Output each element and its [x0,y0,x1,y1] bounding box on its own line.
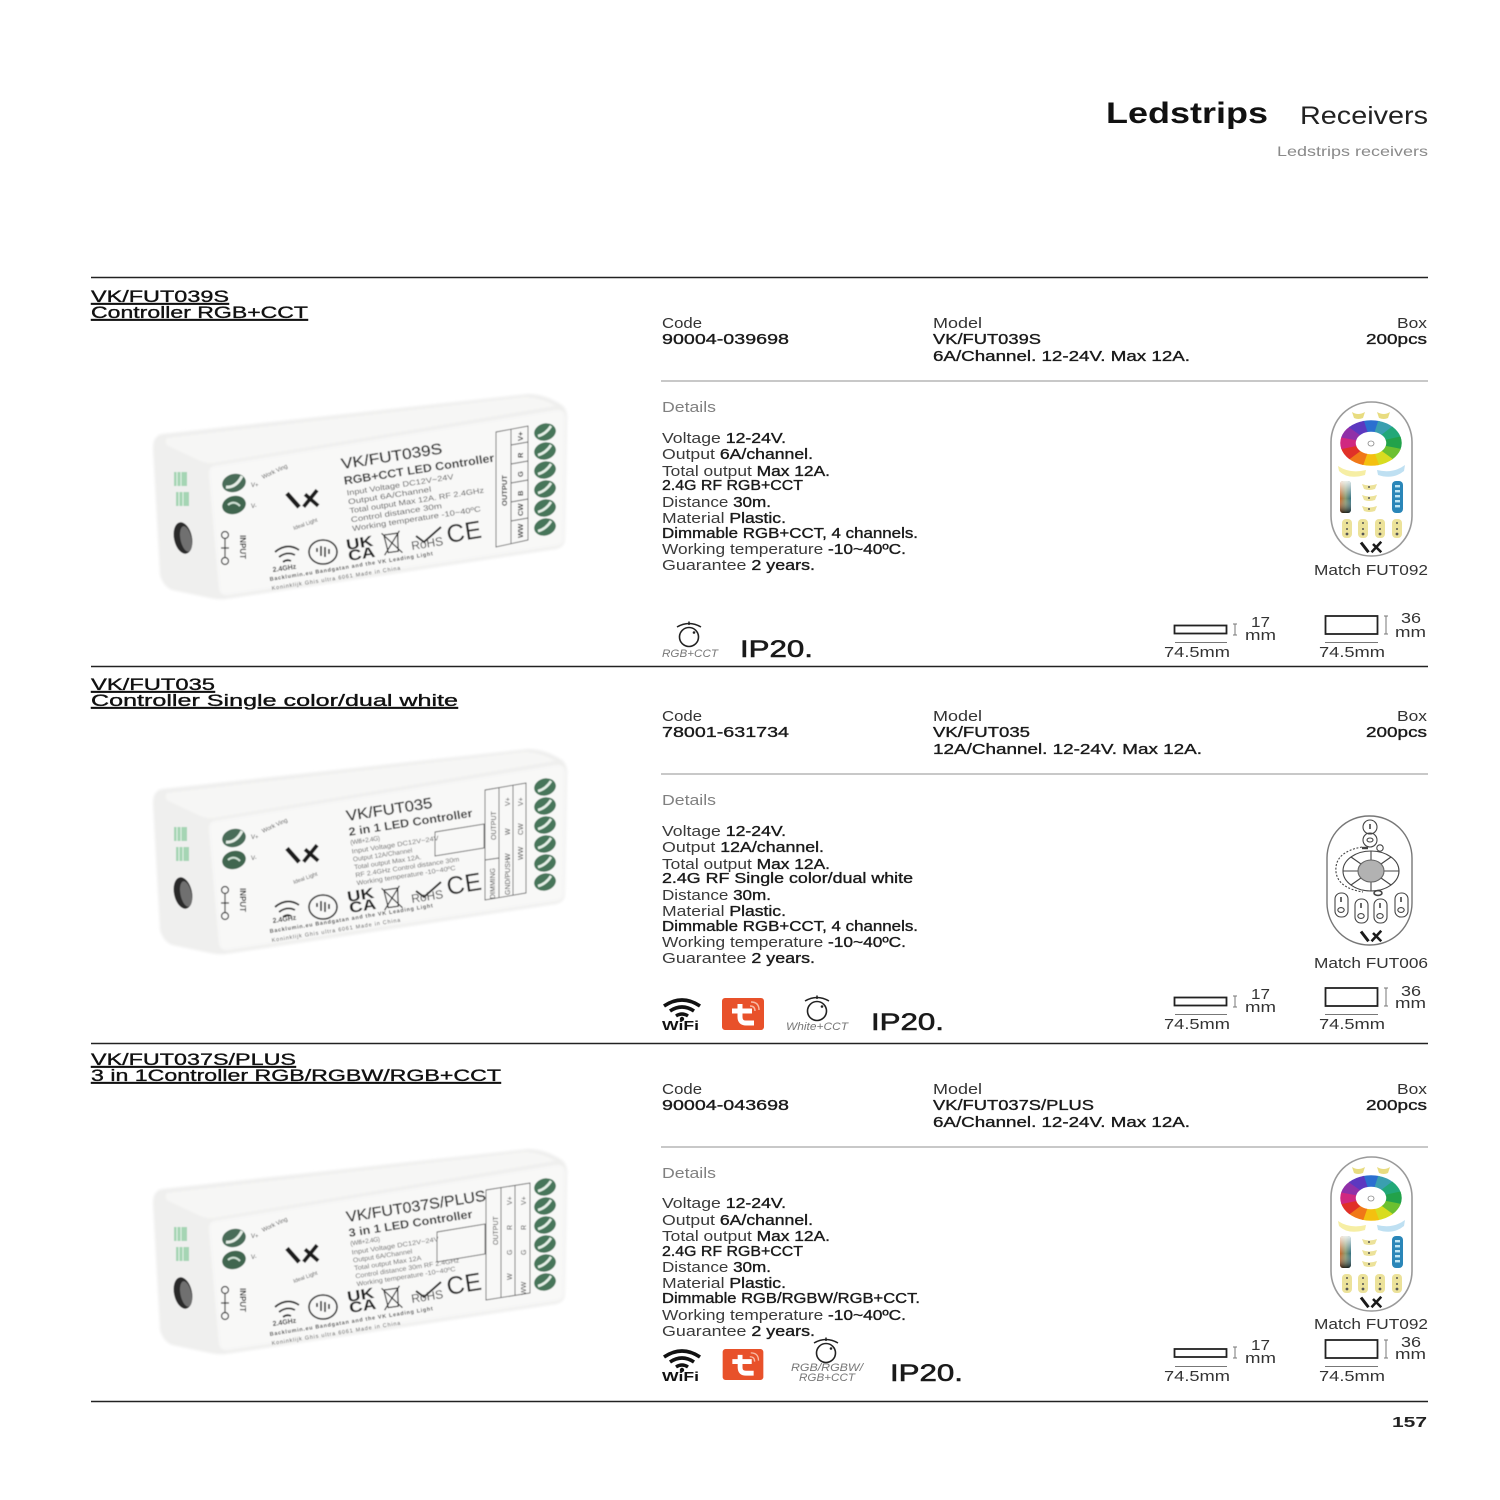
product photo: controller: Total output Max 12A. RF 2.4GHz [349,486,485,515]
product heading [91,675,458,710]
details list [662,793,918,967]
details list: Details [662,1166,716,1182]
product photo: controller: Working temperature -10~40ºC [356,1266,456,1288]
product heading [91,1050,501,1085]
details list: Distance 30m. [662,1260,771,1276]
spec header: Code [662,709,702,725]
product photo: controller: V+ [251,835,259,841]
product photo: controller [153,1149,567,1354]
product photo: controller: G [507,1250,514,1255]
icon: tuya [722,998,764,1030]
icon: dial White+CCT: White+CCT [786,1021,849,1033]
details list: Dimmable RGB+CCT, 4 channels. [662,919,918,935]
remote: FUT092 [1314,402,1428,579]
product photo: controller: CE [445,1268,484,1301]
spec header: 6A/Channel. 12-24V. Max 12A. [933,349,1190,365]
product photo: controller: RoHS [410,887,444,906]
product photo: controller: Output 12A/Channel [353,847,413,863]
product photo: controller: INPUT [238,1288,247,1312]
product photo: controller: Ideal Light [293,871,319,886]
product photo: controller: Backlumin.eu Bandgatan and the VK Leading Light [269,1306,433,1338]
spec header: 200pcs [1366,725,1427,741]
product photo: controller: INPUT [238,535,247,559]
details list: Dimmable RGB/RGBW/RGB+CCT. [662,1291,920,1307]
product photo: controller: Total output Max 12A [354,1255,423,1272]
spec header [662,709,1428,758]
details list: 2.4G RF Single color/dual white [662,871,913,887]
dimensions: 36 [1401,1335,1421,1351]
details list [662,400,918,574]
product photo: controller: CA [347,544,376,565]
spec header: Model [933,1082,982,1098]
product photo: controller: R [516,452,525,458]
product heading: VK/FUT035 [91,675,215,694]
product photo: controller: G [516,471,525,477]
rating: IP20: IP20. [871,1009,944,1036]
spec header: 200pcs [1366,332,1427,348]
product photo: controller: WW [521,1281,528,1295]
details list: Material Plastic. [662,904,786,920]
details list: Total output Max 12A. [662,857,830,873]
details list: Guarantee 2 years. [662,951,815,967]
product photo: controller: CW [516,503,525,516]
details list: Details [662,793,716,809]
icon: dial RGB+CCT [662,622,719,660]
dimensions: 74.5mm [1164,645,1230,661]
product photo: controller: Koninklijk Ghis ultra 6061 Made in China [271,918,402,944]
product photo: controller: Work Ving [261,818,289,835]
product photo: controller: Backlumin.eu Bandgatan and the VK Leading Light [269,903,433,935]
title: Ledstrips [1106,97,1268,130]
spec header: Box [1397,1082,1428,1098]
product photo: controller: OUTPUT [500,475,509,506]
dimensions: 74.5mm [1319,1017,1385,1033]
remote: FUT092: Match FUT092 [1314,1317,1428,1333]
product photo: controller: 2 in 1 LED Controller [348,808,474,839]
dimensions: mm [1245,1000,1276,1016]
dimensions: 74.5mm [1319,645,1385,661]
remote: FUT006: Match FUT006 [1314,956,1428,972]
product photo: controller: V+ [521,1196,528,1205]
remote: FUT092: Match FUT092 [1314,563,1428,579]
spec header: 12A/Channel. 12-24V. Max 12A. [933,742,1202,758]
spec header: VK/FUT037S/PLUS [933,1098,1094,1114]
icon: dial RGB/RGBW/RGB+CCT: RGB+CCT [799,1372,856,1384]
product heading: Controller Single color/dual white [91,691,458,710]
product heading: VK/FUT037S/PLUS [91,1050,296,1069]
details list: Guarantee 2 years. [662,558,815,574]
spec header: 6A/Channel. 12-24V. Max 12A. [933,1115,1190,1131]
dimensions: mm [1395,996,1426,1012]
icon: tuya [723,1349,763,1380]
product photo: controller: V+ [516,431,525,441]
product photo: controller: W [507,1273,514,1280]
product photo: controller: W [505,853,512,860]
dimensions: mm [1245,1351,1276,1367]
product photo: controller: RoHS [410,1287,444,1306]
product photo: controller: DIMMING [490,868,497,899]
product photo: controller: VK/FUT039S [340,441,443,473]
product photo: controller: CW [518,823,525,835]
spec header: VK/FUT039S [933,332,1041,348]
details list: Material Plastic. [662,511,786,527]
dimensions [1164,984,1426,1033]
icon: dial White+CCT [786,996,849,1033]
dimensions: 17 [1251,1338,1270,1354]
product photo: controller: UK [346,1285,375,1306]
details list [662,1166,920,1340]
product photo: controller: Control distance 30m RF 2.4GHz [355,1257,460,1280]
dimensions: 74.5mm [1319,1369,1385,1385]
dimensions [1164,611,1426,661]
spec header: 78001-631734 [662,725,789,741]
details list: Distance 30m. [662,888,771,904]
product heading [91,287,308,322]
details list: Working temperature -10~40ºC. [662,1308,906,1324]
spec header [662,316,1428,365]
spec header: 200pcs [1366,1098,1427,1114]
dimensions: 36 [1401,984,1421,1000]
details list: Voltage 12-24V. [662,1196,786,1212]
product photo: controller: RoHS [410,534,444,553]
product photo: controller: V- [251,856,257,862]
details list: Distance 30m. [662,495,771,511]
product photo: controller [153,749,567,954]
spec header [662,1082,1428,1131]
product photo: controller: WW [516,523,525,538]
spec header: Model [933,709,982,725]
details list: Material Plastic. [662,1276,786,1292]
details list: Voltage 12-24V. [662,431,786,447]
product photo: controller: V+ [507,1196,514,1205]
product photo: controller: 2.4GHz [272,1318,297,1328]
rating: IP20: IP20. [890,1360,963,1387]
product photo: controller: OUTPUT [493,1216,500,1245]
product photo: controller: CA [348,896,377,917]
product heading: Controller RGB+CCT [91,303,308,322]
spec header: Model [933,316,982,332]
spec header: Code [662,1082,702,1098]
dimensions: 36 [1401,611,1421,627]
spec header: VK/FUT035 [933,725,1030,741]
product photo: controller: VK/FUT035 [345,795,434,825]
product photo: controller: Work Ving [261,464,289,481]
product photo: controller: Input Voltage DC12V~24V [346,472,454,498]
dimensions [1164,1335,1426,1385]
dimensions: 74.5mm [1164,1017,1230,1033]
product photo: controller: Total output Max 12A. [354,854,422,871]
title: Receivers [1300,102,1428,130]
product photo: controller: Ideal Light [293,1270,319,1285]
rating: IP20: IP20. [740,636,813,663]
product photo: controller: Koninklijk Ghis ultra 6061 Made in China [271,1321,402,1347]
product photo: controller: Backlumin.eu Bandgatan and the VK Leading Light [269,551,433,583]
product photo: controller: UK [345,533,374,554]
spec header: 90004-039698 [662,332,789,348]
details list: Output 6A/channel. [662,447,813,463]
icon: wifi [662,1351,700,1384]
product photo: controller: INPUT [238,888,247,912]
details list: Guarantee 2 years. [662,1324,815,1340]
details list: Working temperature -10~40ºC. [662,935,906,951]
product photo: controller: 2.4GHz [272,915,297,925]
product heading: 3 in 1Controller RGB/RGBW/RGB+CCT [91,1066,501,1085]
spec header: Box [1397,316,1428,332]
product heading: VK/FUT039S [91,287,229,306]
icon: wifi: WiFi [662,1370,699,1384]
dimensions: mm [1245,628,1276,644]
dimensions: 74.5mm [1164,1369,1230,1385]
product photo: controller: Working temperature -10~40ºC [356,865,456,887]
product photo: controller: VK/FUT037S/PLUS [345,1188,487,1226]
product photo: controller: (Wifi+2.4G) [350,1236,381,1248]
product photo: controller: GND/PUSH [505,858,512,895]
product photo: controller: CA [348,1296,377,1317]
product photo: controller: R [521,1225,528,1230]
product photo: controller: R [507,1225,514,1230]
title [1106,97,1428,159]
product photo: controller: CE [445,516,484,549]
details list: Total output Max 12A. [662,1229,830,1245]
remote: FUT092 [1314,1157,1428,1333]
product photo: controller: Ideal Light [293,517,319,532]
product photo: controller: UK [346,885,375,906]
spec header: Code [662,316,702,332]
title: Ledstrips receivers [1277,143,1428,159]
panel: VK/FUT037S/PLUS [91,1050,1428,1387]
spec header: 90004-043698 [662,1098,789,1114]
product photo: controller: OUTPUT [491,810,498,840]
panel: VK/FUT039S [91,287,1428,663]
icon: dial RGB+CCT: RGB+CCT [662,648,719,660]
product photo: controller: (Wifi+2.4G) [350,835,381,847]
details list: Working temperature -10~40ºC. [662,542,906,558]
icon: wifi: WiFi [662,1019,699,1033]
product photo: controller: V+ [251,483,259,489]
product photo: controller: V- [251,1255,257,1261]
dimensions: 17 [1251,987,1270,1003]
product photo: controller: B [516,490,525,496]
details list: 2.4G RF RGB+CCT [662,478,803,494]
icon: dial RGB/RGBW/RGB+CCT: RGB/RGBW/ [791,1362,864,1374]
product photo: controller: V+ [518,797,525,806]
product photo: controller [153,394,567,599]
product photo: controller: Work Ving [261,1217,289,1234]
product photo: controller: CE [445,868,484,901]
icon: dial RGB/RGBW/RGB+CCT [791,1338,864,1384]
product photo: controller: W [505,828,512,835]
dimensions: 17 [1251,615,1270,631]
icon: wifi [662,1000,700,1033]
details list: Dimmable RGB+CCT, 4 channels. [662,526,918,542]
product photo: controller: V- [251,504,257,510]
product photo: controller: WW [518,846,525,860]
product photo: controller: Output 6A/Channel [347,485,432,506]
details list: 2.4G RF RGB+CCT [662,1244,803,1260]
details list: Voltage 12-24V. [662,824,786,840]
details list: Details [662,400,716,416]
details list: Total output Max 12A. [662,464,830,480]
product photo: controller: V+ [251,1234,259,1240]
details list: Output 12A/channel. [662,840,824,856]
product photo: controller: RGB+CCT LED Controller [343,453,496,488]
product photo: controller: V+ [505,797,512,806]
dimensions: mm [1395,1347,1426,1363]
product photo: controller: Koninklijk Ghis ultra 6061 Made in China [271,566,402,592]
product photo: controller: 3 in 1 LED Controller [348,1209,474,1240]
product photo: controller: 2.4GHz [272,564,297,574]
dimensions: mm [1395,625,1426,641]
product photo: controller: Control distance 30m [350,501,442,524]
product photo: controller: G [521,1250,528,1255]
product photo: controller: Input Voltage DC12V~24V [351,835,440,856]
product photo: controller: Input Voltage DC12V~24V [351,1236,440,1257]
product photo: controller: Output 6A/Channel [353,1248,413,1264]
remote: FUT006 [1314,816,1428,972]
panel: VK/FUT035 [91,675,1428,1036]
spec header: Box [1397,709,1428,725]
product photo: controller: RF 2.4GHz Control distance 30m [355,856,460,879]
page number: 157 [1392,1414,1427,1431]
details list: Output 6A/channel. [662,1213,813,1229]
product photo: controller: Working temperature -10~40ºC [352,504,482,533]
